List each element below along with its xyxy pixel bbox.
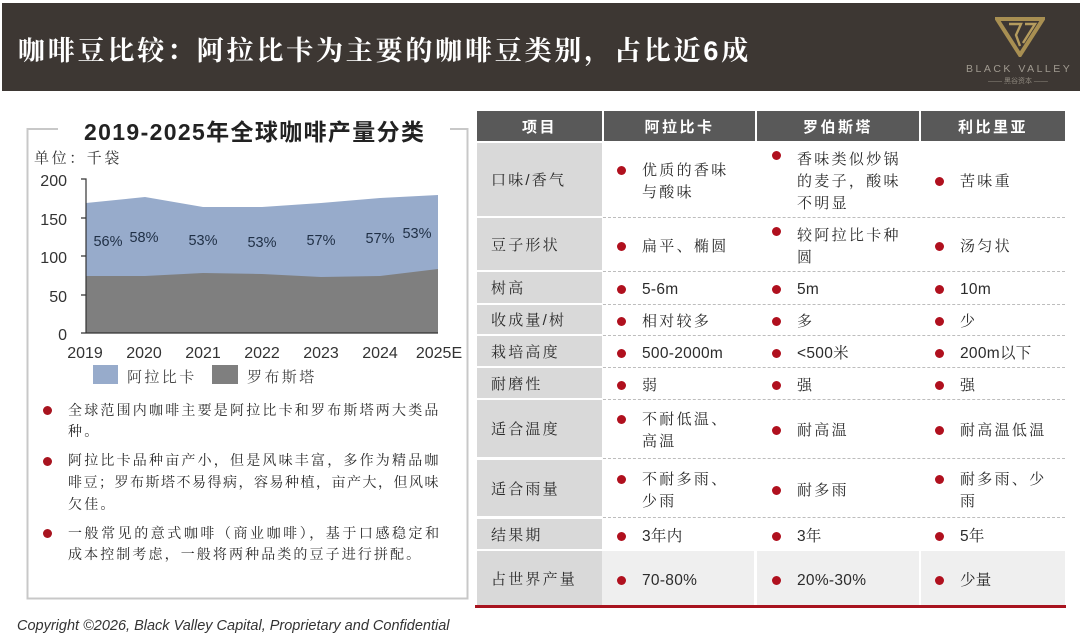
row: world share: 占世界产量 bbox=[491, 570, 577, 588]
share labels: 58% bbox=[129, 230, 159, 246]
icon: gold triangle bbox=[995, 17, 1045, 57]
row: world share: 70-80% bbox=[642, 572, 697, 588]
row: growing altitude: 200m以下 bbox=[960, 344, 1032, 362]
axes bbox=[81, 179, 438, 333]
row: fruiting period: 3年 bbox=[797, 528, 822, 544]
share labels: 56% bbox=[93, 234, 123, 250]
row: growing altitude: 500-2000m bbox=[642, 344, 723, 362]
row: world share: 20%-30% bbox=[797, 572, 866, 588]
row: hardiness: 强 bbox=[960, 376, 977, 394]
row: flavor: 优质的香味 bbox=[642, 162, 729, 179]
y axis labels: 200 bbox=[40, 173, 67, 190]
row: rainfall bbox=[477, 460, 1065, 518]
row: hardiness: 弱 bbox=[642, 376, 659, 394]
row: tree height: 5m bbox=[797, 281, 819, 298]
row: hardiness: 耐磨性 bbox=[491, 376, 543, 392]
panel frame bbox=[26, 128, 468, 600]
row: temperature: 耐高温 bbox=[797, 422, 849, 439]
text block: key points: 种。 bbox=[68, 423, 100, 439]
row: fruiting period bbox=[477, 519, 985, 549]
row: bean shape: 豆子形状 bbox=[491, 236, 560, 254]
row: tree height: 5-6m bbox=[642, 281, 679, 298]
logo wordmark: BLACK VALLEY bbox=[966, 63, 1072, 75]
y axis labels: 150 bbox=[40, 212, 67, 229]
share labels: 53% bbox=[402, 226, 432, 242]
row: rainfall: 耐多雨、少 bbox=[960, 470, 1047, 488]
row: bean shape: 扁平、椭圆 bbox=[642, 238, 729, 254]
legend: 罗布斯塔 bbox=[247, 368, 317, 386]
row: fruiting period: 3年内 bbox=[642, 528, 683, 544]
row: world share: 少量 bbox=[960, 572, 992, 588]
logo: Black Valley bbox=[966, 17, 1072, 85]
legend bbox=[93, 365, 317, 386]
share labels: 53% bbox=[247, 235, 277, 251]
text block: key points: 成本控制考虑，一般将两种品类的豆子进行拼配。 bbox=[68, 546, 422, 562]
x axis labels: 2022 bbox=[244, 345, 280, 362]
y axis labels: 50 bbox=[49, 289, 67, 306]
row: tree height bbox=[477, 272, 1065, 305]
text block: key points: 啡豆；罗布斯塔不易得病，容易种植，亩产大，但风味 bbox=[68, 474, 440, 490]
row: flavor: 口味/香气 bbox=[491, 172, 566, 189]
row: flavor: 香味类似炒锅 bbox=[797, 151, 901, 168]
header bar bbox=[2, 3, 1080, 91]
row: temperature: 耐高温低温 bbox=[960, 422, 1047, 439]
text block: key points: 一般常见的意式咖啡（商业咖啡），基于口感稳定和 bbox=[68, 525, 442, 541]
row: temperature: 适合温度 bbox=[491, 421, 560, 438]
chart title: 2019-2025年全球咖啡产量分类 bbox=[84, 119, 425, 145]
row: flavor bbox=[477, 143, 1065, 218]
row: temperature bbox=[477, 400, 1065, 459]
share labels: 53% bbox=[188, 233, 218, 249]
row: hardiness bbox=[477, 368, 1065, 400]
row: flavor: 不明显 bbox=[797, 195, 849, 212]
copyright footer: Copyright ©2026, Black Valley Capital, Proprietary and Confidential bbox=[17, 618, 450, 634]
x axis labels: 2024 bbox=[362, 345, 398, 362]
row: rainfall: 适合雨量 bbox=[491, 480, 560, 498]
row: flavor: 苦味重 bbox=[960, 173, 1012, 190]
row: bean shape: 较阿拉比卡种 bbox=[797, 226, 901, 244]
text block: key points: 阿拉比卡品种亩产小，但是风味丰富，多作为精品咖 bbox=[68, 452, 441, 468]
share labels bbox=[93, 226, 432, 251]
row: fruiting period: 结果期 bbox=[491, 526, 543, 544]
area: robusta bbox=[86, 269, 438, 333]
row: flavor: 与酸味 bbox=[642, 184, 694, 201]
table header bbox=[477, 111, 1065, 141]
row: tree height: 10m bbox=[960, 281, 991, 298]
row: rainfall: 耐多雨 bbox=[797, 482, 849, 498]
row: yield per tree: 多 bbox=[797, 313, 814, 330]
text block: key points: 欠佳。 bbox=[68, 496, 117, 512]
table header: 利比里亚 bbox=[958, 118, 1028, 136]
row: growing altitude bbox=[477, 336, 1065, 368]
row: rainfall: 少雨 bbox=[642, 492, 677, 510]
row: yield per tree: 收成量/树 bbox=[491, 312, 566, 329]
row: hardiness: 强 bbox=[797, 376, 814, 394]
table header: 罗伯斯塔 bbox=[803, 118, 873, 136]
row: rainfall: 不耐多雨、 bbox=[642, 470, 729, 488]
y axis labels: 100 bbox=[40, 250, 67, 267]
row: temperature: 高温 bbox=[642, 433, 677, 450]
logo subtitle: —— 黑谷资本 —— bbox=[988, 78, 1048, 85]
x axis labels: 2021 bbox=[185, 345, 221, 362]
x axis labels bbox=[67, 345, 462, 362]
x axis labels: 2019 bbox=[67, 345, 103, 362]
y axis labels bbox=[40, 173, 67, 344]
x axis labels: 2023 bbox=[303, 345, 339, 362]
share labels: 57% bbox=[365, 231, 395, 247]
area: arabica bbox=[86, 195, 438, 333]
row: yield per tree bbox=[477, 305, 1065, 336]
legend: 阿拉比卡 bbox=[127, 368, 197, 386]
table bottom rule bbox=[475, 605, 1066, 608]
row: fruiting period: 5年 bbox=[960, 528, 985, 544]
row: rainfall: 雨 bbox=[960, 492, 977, 510]
x axis labels: 2025E bbox=[416, 345, 462, 362]
text block: key points bbox=[43, 402, 442, 562]
row: yield per tree: 少 bbox=[960, 313, 977, 330]
row: world share bbox=[477, 551, 1065, 605]
row: tree height: 树高 bbox=[491, 280, 525, 297]
row: yield per tree: 相对较多 bbox=[642, 313, 711, 330]
unit label: 单位：千袋 bbox=[34, 150, 122, 167]
x axis labels: 2020 bbox=[126, 345, 162, 362]
table header: 阿拉比卡 bbox=[644, 118, 714, 136]
row: bean shape: 圆 bbox=[797, 248, 814, 266]
row: bean shape bbox=[477, 218, 1065, 272]
table header: 项目 bbox=[522, 118, 557, 136]
row: flavor: 的麦子，酸味 bbox=[797, 173, 901, 190]
area chart bbox=[40, 173, 462, 386]
row: growing altitude: <500米 bbox=[797, 344, 849, 362]
row: growing altitude: 栽培高度 bbox=[491, 344, 560, 360]
row: temperature: 不耐低温、 bbox=[642, 411, 729, 428]
y axis labels: 0 bbox=[58, 327, 67, 344]
text block: key points: 全球范围内咖啡主要是阿拉比卡和罗布斯塔两大类品 bbox=[68, 402, 441, 418]
panel: production chart and notes bbox=[26, 119, 468, 600]
share labels: 57% bbox=[306, 233, 336, 249]
row: bean shape: 汤匀状 bbox=[960, 238, 1012, 254]
title: 咖啡豆比较：阿拉比卡为主要的咖啡豆类别，占比近6成 bbox=[18, 36, 751, 66]
